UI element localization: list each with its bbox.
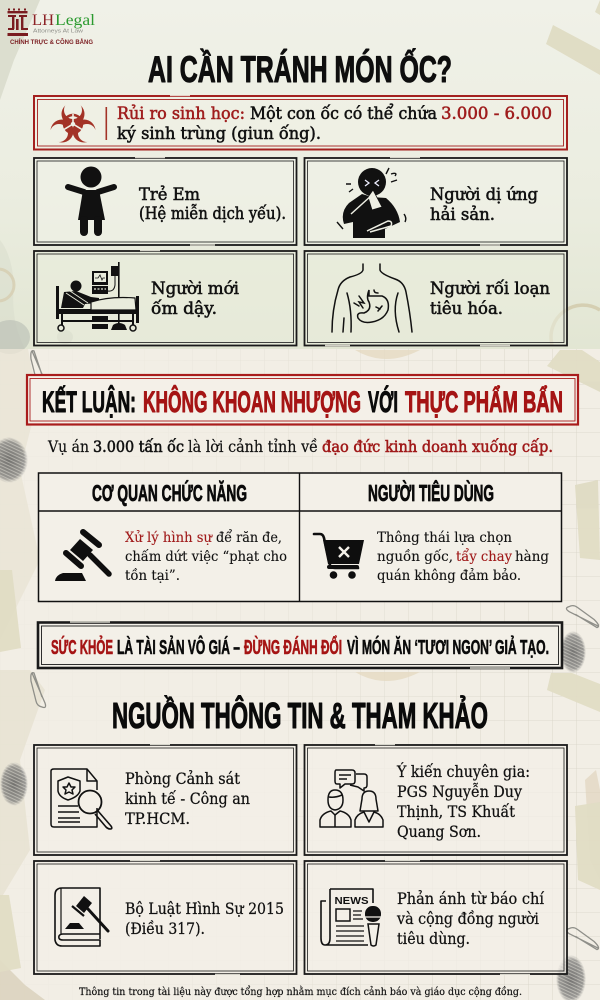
text <box>125 900 284 938</box>
text <box>396 890 545 948</box>
text: consumers: Thông thái lựa chọn <box>377 530 512 546</box>
risk text <box>117 104 552 143</box>
text: Người dị ứng <box>430 185 538 204</box>
text: consumers: nguồn gốc, <box>377 548 453 565</box>
column heading: authorities: CƠ QUAN CHỨC NĂNG <box>92 479 247 506</box>
panel: biological risk <box>34 96 567 150</box>
text: lead sentence <box>47 438 553 456</box>
text: Ý kiến chuyên gia: <box>396 763 530 781</box>
logo slogan: CHÍNH TRỰC & CÔNG BẰNG <box>10 38 93 46</box>
text: Phản ánh từ báo chí <box>397 890 545 908</box>
text: consumers <box>377 530 549 584</box>
risk text: Một con ốc có thể chứa <box>250 104 437 123</box>
text: Trẻ Em <box>139 185 200 204</box>
text: authorities: tồn tại”. <box>125 567 180 584</box>
column heading: consumers: NGƯỜI TIÊU DÙNG <box>368 479 494 506</box>
text: authorities: để răn đe, <box>216 528 282 546</box>
risk text: ký sinh trùng (giun ống). <box>117 124 321 143</box>
icon: hospital bed <box>56 262 139 331</box>
icon: newspaper and microphone <box>321 889 382 946</box>
text: Người rối loạn <box>430 279 550 298</box>
logo: LH Legal <box>8 8 96 46</box>
table: responsibilities <box>38 473 562 602</box>
logo wordmark: LH <box>32 12 54 29</box>
banner text: ĐỪNG ĐÁNH ĐỔI <box>244 635 342 659</box>
text: Quang Sơn. <box>397 823 481 841</box>
icon: biohazard <box>50 101 96 142</box>
icon: child <box>68 166 114 236</box>
panel: recovering patients <box>34 251 296 346</box>
icon: sneezing person <box>337 168 406 238</box>
text: Người mới <box>151 279 239 298</box>
icon: gavel <box>55 532 109 581</box>
text: hải sản. <box>430 205 495 224</box>
icon: experts talking <box>320 770 383 827</box>
text: authorities: Xử lý hình sự <box>125 529 213 546</box>
text: lead sentence: Vụ án <box>47 438 89 456</box>
text: (Điều 317). <box>125 920 205 938</box>
text: Thịnh, TS Khuất <box>397 803 516 821</box>
conclusion heading: KẾT LUẬN: <box>42 385 136 419</box>
decoration: worn border flecks <box>70 96 530 974</box>
text: TP.HCM. <box>125 810 190 828</box>
conclusion heading: VỚI <box>368 385 398 419</box>
text: lead sentence: đạo đức kinh doanh xuống cấp. <box>322 438 553 456</box>
text: consumers: tẩy chay <box>456 547 512 565</box>
icon: logo mark <box>8 8 28 36</box>
text <box>151 279 239 318</box>
icon: law book with gavel <box>55 888 108 946</box>
icon: shopping cart with cross <box>314 534 364 579</box>
decoration: fingerprints <box>0 437 586 1000</box>
risk text: Rủi ro sinh học: <box>117 104 245 123</box>
panel: press reports <box>304 861 567 974</box>
panel: conclusion banner <box>27 375 578 424</box>
decoration: paper clips <box>31 351 600 957</box>
icon: stomach ache <box>332 264 412 332</box>
text: authorities: chấm dứt việc “phạt cho <box>125 548 287 565</box>
text: lead sentence: 3.000 tấn ốc <box>93 438 184 456</box>
panel: health warning banner <box>38 622 562 668</box>
text: lead sentence: là lời cảnh tỉnh về <box>188 438 318 456</box>
text <box>430 279 550 318</box>
panel: penal code <box>34 861 296 974</box>
text: consumers: hàng <box>515 548 549 565</box>
text: authorities <box>125 528 287 584</box>
text: tiêu hóa. <box>430 299 503 318</box>
risk text: 3.000 - 6.000 <box>441 104 552 123</box>
icon: police document <box>51 769 112 829</box>
text: kinh tế - Công an <box>125 790 250 808</box>
text <box>396 763 530 841</box>
logo: LH Legal: Legal <box>55 12 96 29</box>
banner text: SỨC KHỎE <box>51 635 113 659</box>
panel: economic police <box>34 745 296 855</box>
text: PGS Nguyễn Duy <box>397 783 522 801</box>
panel: children <box>34 158 296 245</box>
banner text <box>51 635 549 659</box>
icon: newspaper and microphone: NEWS <box>334 895 368 907</box>
panel: seafood allergy <box>304 158 567 245</box>
logo subtitle: Attorneys At Law <box>33 28 84 34</box>
footer note: Thông tin trong tài liệu này được tổng hợp nhằm mục đích cảnh báo và giáo dục cộng đồng. <box>79 985 522 998</box>
panel: digestive disorders <box>304 251 567 346</box>
text: và cộng đồng người <box>396 910 539 928</box>
text: (Hệ miễn dịch yếu). <box>139 204 286 223</box>
text <box>125 770 250 828</box>
title: AI CẦN TRÁNH MÓN ỐC? <box>148 48 452 90</box>
text: tiêu dùng. <box>397 930 470 948</box>
banner text: LÀ TÀI SẢN VÔ GIÁ – <box>117 635 240 659</box>
text <box>430 185 538 224</box>
text: Phòng Cảnh sát <box>125 770 241 788</box>
text: ốm dậy. <box>151 299 217 318</box>
text <box>139 185 286 223</box>
divider <box>106 107 107 140</box>
panel: expert opinion <box>304 745 567 855</box>
text: Bộ Luật Hình Sự 2015 <box>125 900 284 918</box>
text: consumers: quán không đảm bảo. <box>377 567 521 584</box>
conclusion heading: KHÔNG KHOAN NHƯỢNG <box>143 385 361 419</box>
